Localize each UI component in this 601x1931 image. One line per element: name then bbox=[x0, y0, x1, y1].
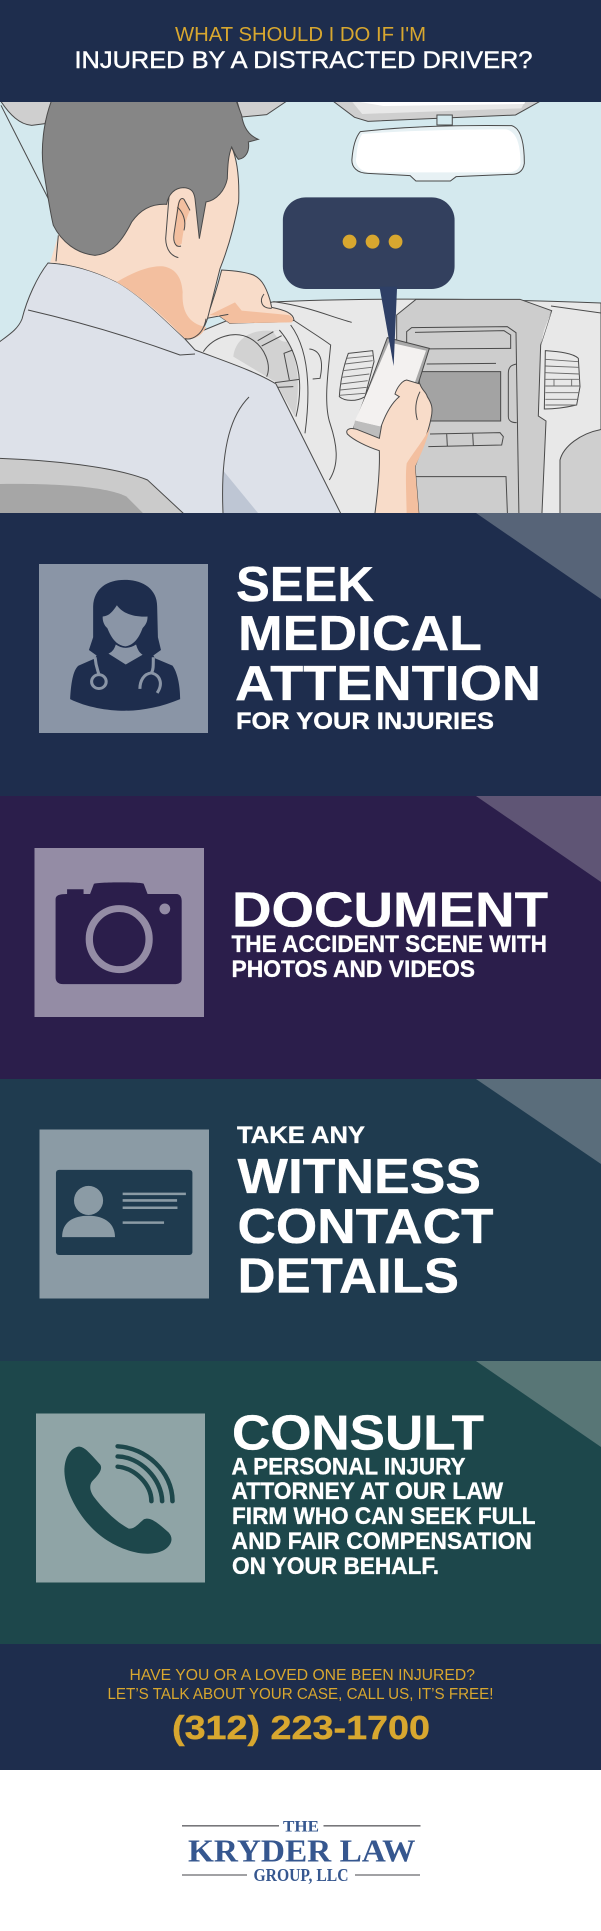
neck and face bbox=[50, 147, 239, 339]
icon: camera bbox=[34, 848, 204, 1017]
panel: consult an attorney bbox=[0, 1361, 601, 1644]
illustration: driver texting at the wheel bbox=[0, 100, 601, 520]
icon: id card bbox=[40, 1130, 209, 1298]
heading: MEDICAL bbox=[238, 607, 482, 661]
heading: THE ACCIDENT SCENE WITH bbox=[232, 931, 547, 958]
infotainment screen bbox=[419, 372, 501, 421]
heading: DOCUMENT bbox=[232, 884, 548, 938]
ear bbox=[166, 197, 190, 258]
heading bbox=[237, 1122, 494, 1304]
center console bbox=[397, 299, 552, 520]
roof lining bbox=[0, 100, 288, 202]
driver shirt bbox=[0, 263, 344, 520]
driver seat bbox=[0, 458, 185, 515]
heading: ON YOUR BEHALF. bbox=[232, 1553, 439, 1580]
call to action text: HAVE YOU OR A LOVED ONE BEEN INJURED? bbox=[130, 1667, 475, 1684]
heading: ATTORNEY AT OUR LAW bbox=[232, 1478, 503, 1505]
heading: DETAILS bbox=[238, 1250, 459, 1304]
heading: SEEK bbox=[236, 558, 374, 612]
left air vent bbox=[339, 351, 374, 400]
heading: ATTENTION bbox=[235, 657, 541, 711]
buttons bbox=[428, 433, 503, 447]
title line 2: INJURED BY A DISTRACTED DRIVER? bbox=[74, 47, 532, 74]
heading: PHOTOS AND VIDEOS bbox=[232, 956, 475, 983]
mirror mount bbox=[332, 100, 542, 125]
heading: CONTACT bbox=[238, 1200, 494, 1254]
logo: the kryder law group bbox=[182, 1818, 420, 1885]
heading: CONSULT bbox=[232, 1406, 484, 1460]
logo: the kryder law group: KRYDER LAW bbox=[188, 1832, 416, 1868]
title line 1: WHAT SHOULD I DO IF I'M bbox=[175, 24, 426, 46]
logo: the kryder law group: THE bbox=[283, 1818, 319, 1836]
hand holding phone bbox=[347, 380, 432, 520]
heading bbox=[235, 558, 541, 735]
icon: phone bbox=[36, 1414, 205, 1582]
heading: AND FAIR COMPENSATION bbox=[232, 1528, 532, 1555]
icon: doctor bbox=[39, 564, 208, 733]
call to action banner bbox=[0, 1644, 601, 1770]
panel: seek medical attention bbox=[0, 513, 601, 796]
phone number: (312) 223-1700 bbox=[172, 1709, 430, 1746]
heading: TAKE ANY bbox=[237, 1122, 365, 1149]
heading bbox=[232, 884, 548, 983]
heading: WITNESS bbox=[238, 1150, 481, 1204]
right air vent bbox=[544, 351, 580, 409]
speech bubble with typing dots bbox=[283, 197, 455, 366]
call to action text: LET’S TALK ABOUT YOUR CASE, CALL US, IT’S FREE! bbox=[108, 1686, 494, 1703]
heading: FOR YOUR INJURIES bbox=[236, 708, 494, 735]
call to action text bbox=[108, 1667, 494, 1703]
heading bbox=[232, 1406, 536, 1580]
panel: witness contact details bbox=[0, 1079, 601, 1361]
dashboard bbox=[180, 299, 601, 520]
hair bbox=[42, 100, 258, 255]
logo: the kryder law group: GROUP, LLC bbox=[254, 1865, 348, 1885]
lower compartment bbox=[416, 476, 508, 513]
heading: A PERSONAL INJURY bbox=[232, 1454, 466, 1480]
hand on steering wheel bbox=[207, 270, 294, 323]
smartphone bbox=[353, 338, 429, 438]
header banner bbox=[0, 0, 601, 102]
steering wheel bbox=[203, 325, 322, 433]
rear-view mirror bbox=[352, 126, 524, 181]
panel: document the accident scene bbox=[0, 796, 601, 1079]
passenger seat bbox=[560, 429, 601, 520]
heading: FIRM WHO CAN SEEK FULL bbox=[232, 1503, 536, 1530]
